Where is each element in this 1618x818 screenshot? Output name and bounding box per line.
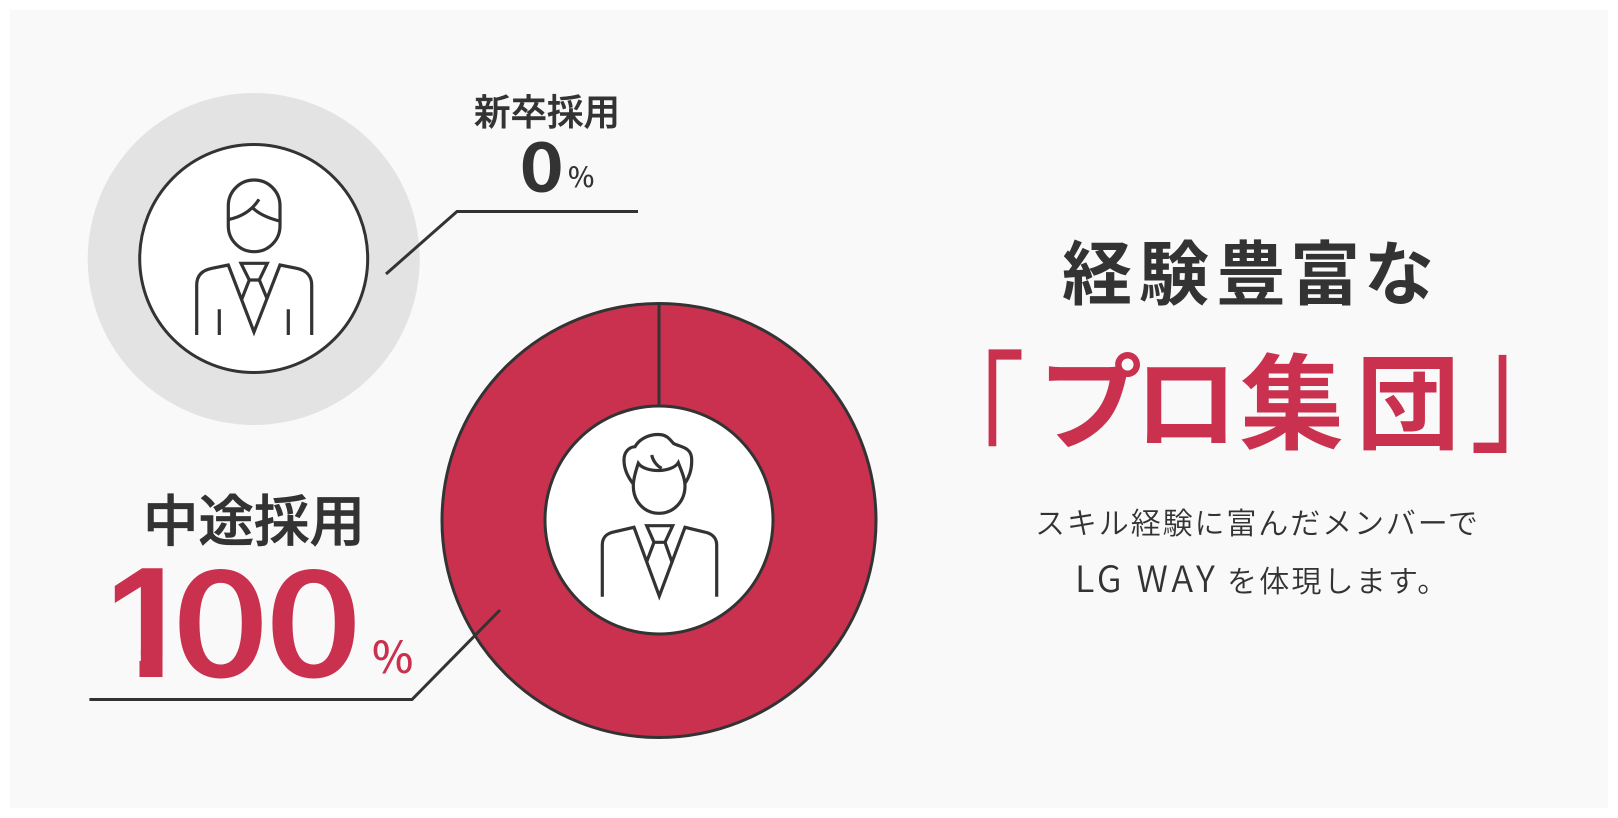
- value: 100%: 0: [172, 512, 269, 718]
- value: 0%: %: [568, 156, 594, 196]
- text block: description: を体現します。: [1227, 557, 1449, 601]
- chart: new graduates 0% ring: [88, 93, 420, 425]
- heading: professional group: [921, 265, 1574, 520]
- callout line: mid-career: [89, 610, 500, 700]
- icon: young person in suit: [197, 180, 312, 335]
- heading: experienced: 経験豊富な: [1062, 219, 1434, 320]
- text block: description: LG WAY: [1075, 551, 1218, 603]
- value: 0%: [520, 116, 594, 211]
- value: 100%: [114, 568, 412, 678]
- text block: description: [1035, 499, 1480, 603]
- value: 100%: 1: [104, 535, 192, 711]
- text block: description: スキル経験に富んだメンバーで: [1035, 499, 1480, 543]
- value: 100%: 1: [104, 535, 192, 711]
- value: 100%: 0: [265, 512, 362, 718]
- heading: professional group: 「: [921, 303, 1025, 520]
- value: 0%: 0: [520, 116, 564, 211]
- heading: professional group: 」: [1470, 265, 1574, 484]
- label: mid-career: 中途採用: [143, 477, 365, 557]
- value: 100%: %: [372, 622, 413, 686]
- callout line: new graduates: [386, 212, 638, 274]
- heading: professional group: プロ集団: [1038, 320, 1460, 471]
- chart: mid-career 100% donut: [442, 303, 876, 738]
- label: new graduates: 新卒採用: [474, 83, 620, 136]
- icon: experienced person in suit: [602, 434, 717, 597]
